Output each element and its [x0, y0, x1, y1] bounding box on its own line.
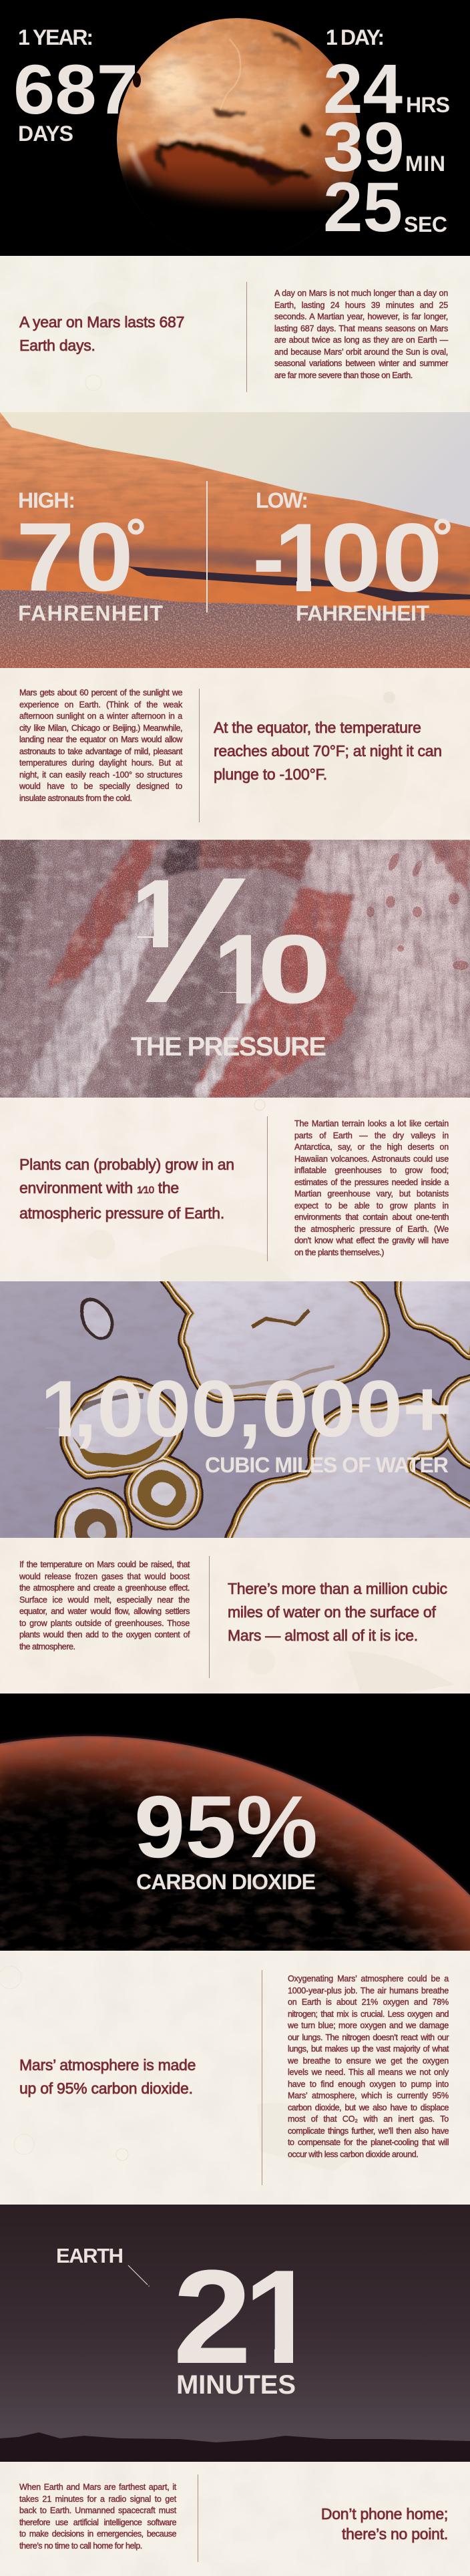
- panel: temperature explanation: [0, 668, 470, 840]
- body text: sunlight and temperature: experience on Earth. (Think of the weak: [19, 700, 182, 709]
- label: 1 year: 1 YEAR:: [18, 25, 93, 49]
- label: fahrenheit high: FAHRENHEIT: [18, 601, 163, 625]
- label: minutes: MINUTES: [176, 2370, 296, 2400]
- body text: oxygenating Mars: our lungs. The nitrogen doesn’t react with our: [288, 2032, 449, 2042]
- body text: melting ice: If the temperature on Mars could be raised, that: [19, 1560, 190, 1569]
- body text: day and year: seasonal variations between winter and summer: [274, 359, 448, 368]
- body text: oxygenating Mars: have to find enough oxygen to pump into: [288, 2079, 449, 2088]
- body text: sunlight and temperature: afternoon sunlight on a winter afternoon in a: [19, 711, 182, 721]
- panel: water explanation: [0, 1538, 470, 1694]
- image: limb of Mars: [0, 1730, 470, 1951]
- number: 25 seconds: [323, 168, 447, 247]
- body text: radio signal: there’s no time to call home for help.: [19, 2541, 142, 2551]
- body text: oxygenating Mars: Oxygenating Mars’ atmosphere could be a: [288, 1974, 449, 1983]
- body text: day and year: [274, 289, 449, 379]
- heading: carbon dioxide atmosphere: [19, 2056, 196, 2098]
- number: 21: [178, 2269, 293, 2363]
- body text: Martian terrain: [294, 1119, 449, 1257]
- body text: sunlight and temperature: Mars gets about 60 percent of the sunlight we: [19, 688, 182, 697]
- panel: atmosphere photo: [0, 1734, 470, 1951]
- body text: oxygenating Mars: carbon dioxide, but we also have to displace: [288, 2103, 449, 2112]
- number: one tenth: 1: [132, 861, 186, 967]
- number: 39 minutes: 39: [323, 108, 405, 186]
- number: one million plus: [45, 1380, 449, 1448]
- body text: Martian terrain: parts of Earth — the dry valleys in: [294, 1130, 449, 1140]
- body text: radio signal: back to Earth. Unmanned spacecraft must: [19, 2506, 176, 2515]
- panel: year explanation: [0, 256, 470, 412]
- body text: melting ice: the atmosphere and create a greenhouse effect.: [19, 1583, 190, 1593]
- body text: radio signal: takes 21 minutes for a radio signal to get: [19, 2494, 176, 2504]
- body text: oxygenating Mars: we turn blue; more oxygen and we damage: [288, 2021, 449, 2030]
- body text: oxygenating Mars: most of that CO₂ with an inert gas. To: [288, 2114, 449, 2124]
- heading: carbon dioxide atmosphere: Mars’ atmosphere is made: [19, 2056, 196, 2074]
- heading: plants: environment with 1⁄10 the: [19, 1179, 179, 1196]
- body text: day and year: and because Mars’ orbit around the Sun is oval,: [274, 347, 448, 357]
- heading: a year on Mars: Earth days.: [19, 337, 95, 354]
- body text: oxygenating Mars: lungs, but makes up the vast majority of what: [288, 2044, 449, 2054]
- number: 21: 2: [173, 2243, 252, 2392]
- label: fahrenheit low: FAHRENHEIT: [296, 601, 429, 625]
- number: one tenth: 0: [257, 915, 332, 1023]
- body text: melting ice: to grow plants outside of greenhouses. Those: [19, 1618, 190, 1627]
- heading: million cubic miles: [228, 1580, 447, 1644]
- number: minus 100 degrees: °: [432, 508, 453, 567]
- heading: equator temperature: [214, 719, 442, 783]
- number: 25 seconds: SEC: [404, 212, 447, 236]
- body text: sunlight and temperature: temperatures during daylight hours. But at: [19, 758, 182, 768]
- icon: planet Mars: [117, 18, 359, 256]
- number: 25 seconds: 25: [323, 168, 403, 247]
- label: the pressure: THE PRESSURE: [131, 1032, 326, 1062]
- label: Earth: EARTH: [56, 2244, 124, 2267]
- heading: million cubic miles: miles of water on the surface of: [228, 1603, 436, 1621]
- body text: Martian terrain: Hawaiian volcanoes. Astronauts could use: [294, 1154, 449, 1164]
- number: 24 hours: [323, 50, 450, 128]
- heading: plants: Plants can (probably) grow in an: [19, 1156, 234, 1173]
- number: 687: 687: [13, 51, 138, 129]
- panel: atmosphere explanation: [0, 1951, 470, 2205]
- body text: day and year: are about twice as long as they are on Earth —: [274, 335, 448, 345]
- image: south polar ice formations: [0, 1276, 470, 1550]
- label: carbon dioxide: CARBON DIOXIDE: [136, 1870, 316, 1894]
- heading: a year on Mars: A year on Mars lasts 687: [19, 313, 184, 330]
- number: one million plus: ,000,000+: [73, 1364, 452, 1454]
- body text: Martian terrain: The Martian terrain looks a lot like certain: [294, 1119, 449, 1128]
- label: days: DAYS: [18, 122, 73, 146]
- body text: melting ice: the atmosphere.: [19, 1642, 75, 1651]
- number: minus 100 degrees: [256, 518, 451, 592]
- body text: sunlight and temperature: insulate astronauts from the cold.: [19, 794, 132, 803]
- body text: day and year: lasting 687 days. That means seasons on Mars: [274, 323, 448, 333]
- panel: pressure explanation: [0, 1098, 470, 1281]
- body text: melting ice: would release frozen gases that would boost: [19, 1571, 190, 1581]
- body text: Martian terrain: environments that contain about one-tenth: [294, 1213, 449, 1222]
- body text: oxygenating Mars: nitrogen; that mix is crucial. Less oxygen and: [288, 2009, 449, 2019]
- body text: radio signal: When Earth and Mars are farthest apart, it: [19, 2482, 176, 2492]
- body text: oxygenating Mars: we breathe to ensure we get the oxygen: [288, 2056, 449, 2066]
- body text: melting ice: Surface ice would melt, especially near the: [19, 1595, 190, 1605]
- heading: plants: atmospheric pressure of Earth.: [19, 1204, 224, 1222]
- image: eroded Martian terrain: [0, 840, 470, 1098]
- body text: oxygenating Mars: complicate things further, we’ll then also have: [288, 2126, 449, 2135]
- number: 21: 1: [244, 2243, 318, 2392]
- body text: Martian terrain: inflatable greenhouses to grow food;: [294, 1166, 449, 1175]
- arrow: pointer to Earth: [128, 2265, 150, 2287]
- number: 70 degrees: °: [126, 508, 146, 567]
- label: high: HIGH:: [18, 488, 75, 512]
- heading: don't phone home: [321, 2505, 448, 2543]
- body text: oxygenating Mars: Mars’ atmosphere, which is currently 95%: [288, 2091, 449, 2100]
- body text: radio signal: therefore use artificial intelligence software: [19, 2517, 176, 2527]
- body text: oxygenating Mars: on Earth is about 21% oxygen and 78%: [288, 1997, 449, 2007]
- label: 1 day: 1 DAY:: [326, 25, 385, 49]
- body text: day and year: seconds. A Martian year, however, is far longer,: [274, 312, 448, 321]
- image: Martian hillside: [0, 412, 470, 668]
- panel: pressure photo: [0, 840, 470, 1098]
- number: 39 minutes: MIN: [405, 152, 445, 176]
- heading: million cubic miles: Mars — almost all of it is ice.: [228, 1627, 418, 1644]
- body text: sunlight and temperature: [19, 688, 183, 803]
- body text: Martian terrain: expect to be able to grow plants in: [294, 1201, 449, 1211]
- panel: water photo: [0, 1281, 470, 1538]
- body text: melting ice: [19, 1560, 190, 1651]
- body text: oxygenating Mars: 1000-year-plus job. The air humans breathe: [288, 1985, 449, 1995]
- number: 70 degrees: 70: [16, 502, 134, 611]
- heading: equator temperature: At the equator, the temperature: [214, 719, 421, 736]
- number: one tenth: 1: [214, 915, 268, 1023]
- panel: hero, year and day length: [16, 18, 449, 256]
- body text: radio signal: to make decisions in emergencies, because: [19, 2529, 176, 2539]
- body text: day and year: Earth, lasting 24 hours 39 minutes and 25: [274, 301, 448, 310]
- body text: sunlight and temperature: city like Milan, Chicago or Beijing.) Meanwhile,: [19, 723, 182, 732]
- label: low: LOW:: [256, 488, 308, 512]
- heading: equator temperature: plunge to -100°F.: [214, 766, 327, 783]
- number: minus 100 degrees: 00: [320, 503, 443, 612]
- body text: oxygenating Mars: to compensate for the planet-cooling that will: [288, 2138, 449, 2147]
- body text: sunlight and temperature: would have to be specially designed to: [19, 782, 182, 791]
- body text: Martian terrain: Antarctica, say, or the high deserts on: [294, 1142, 449, 1152]
- body text: oxygenating Mars: levels we need. This all means we not only: [288, 2068, 449, 2077]
- body text: radio signal: [19, 2482, 176, 2551]
- label: cubic miles of water: CUBIC MILES OF WATER: [205, 1453, 449, 1477]
- body text: Martian terrain: don’t know what effect the gravity will have: [294, 1236, 449, 1245]
- panel: signal delay explanation: [0, 2462, 470, 2576]
- number: minus 100 degrees: 1: [274, 503, 328, 612]
- body text: day and year: are far more severe than those on Earth.: [274, 370, 413, 379]
- body text: oxygenating Mars: [287, 1974, 449, 2159]
- number: 95 percent: 95%: [134, 1778, 318, 1876]
- panel: signal delay photo: [0, 2205, 470, 2462]
- body text: day and year: A day on Mars is not much longer than a day on: [274, 289, 448, 298]
- heading: million cubic miles: There’s more than a million cubic: [228, 1580, 447, 1597]
- number: 24 hours: HRS: [406, 93, 450, 117]
- heading: equator temperature: reaches about 70°F; at night it can: [214, 742, 442, 759]
- panel: temperature photo: [0, 412, 470, 668]
- heading: don't phone home: there’s no point.: [342, 2525, 448, 2543]
- body text: oxygenating Mars: occur with less carbon dioxide around.: [288, 2150, 418, 2159]
- number: 24 hours: 24: [323, 50, 403, 128]
- body text: melting ice: equator, and water would flow, allowing settlers: [19, 1607, 190, 1616]
- number: one tenth: [138, 878, 326, 1003]
- image: dusk sky and horizon: [0, 2205, 470, 2462]
- heading: don't phone home: Don’t phone home;: [321, 2505, 448, 2523]
- number: one million plus: 1: [41, 1364, 85, 1454]
- body text: Martian terrain: estimates of the pressures needed inside a: [294, 1177, 449, 1186]
- heading: a year on Mars: [19, 313, 184, 354]
- body text: Martian terrain: on the plants themselves.): [294, 1248, 384, 1257]
- heading: carbon dioxide atmosphere: up of 95% carbon dioxide.: [19, 2080, 193, 2097]
- body text: sunlight and temperature: astronauts to take advantage of mild, pleasant: [19, 747, 182, 756]
- heading: plants: [19, 1156, 234, 1223]
- number: 39 minutes: [323, 108, 445, 186]
- number: minus 100 degrees: -: [252, 503, 285, 612]
- body text: Martian terrain: Martian greenhouse vary, but botanists: [294, 1189, 449, 1198]
- body text: Martian terrain: the atmospheric pressure of Earth. (We: [294, 1224, 449, 1233]
- body text: sunlight and temperature: night, it can easily reach -100° so structures: [19, 770, 182, 779]
- body text: sunlight and temperature: landing near the equator on Mars would allow: [19, 735, 182, 744]
- body text: melting ice: plants would then add to the oxygen content of: [19, 1630, 190, 1639]
